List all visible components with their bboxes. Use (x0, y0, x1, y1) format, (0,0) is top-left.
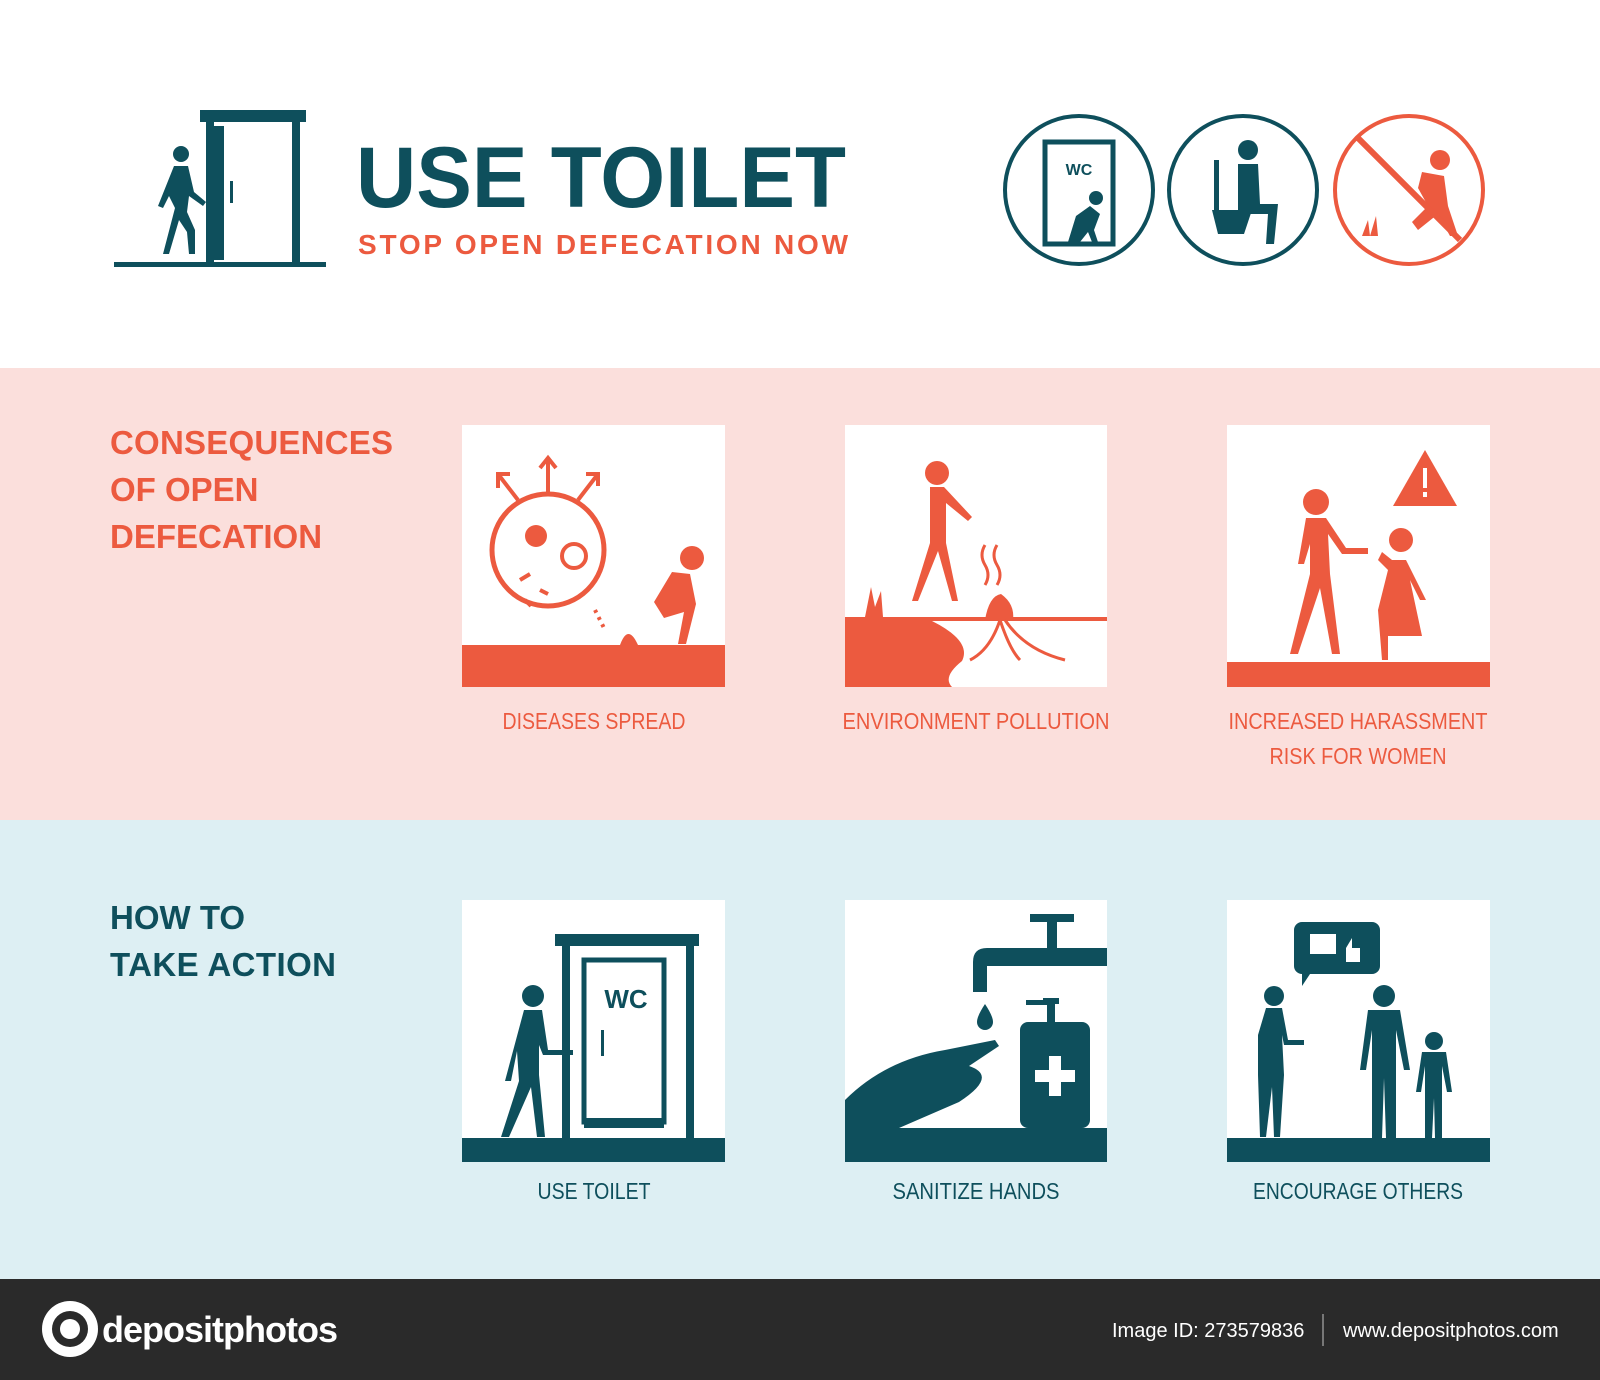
band: action background (0, 820, 1600, 1279)
footer: depositphotos (102, 1309, 337, 1350)
heading: consequences: CONSEQUENCES (110, 424, 393, 461)
header background (0, 0, 1600, 368)
footer: Image ID: 273579836 (1112, 1320, 1304, 1342)
panel: diseases spread (462, 425, 725, 687)
panel: harassment (1227, 425, 1490, 687)
panel: use toilet (462, 900, 725, 1162)
icon: WC circle (1005, 116, 1153, 264)
caption: use toilet: USE TOILET (538, 1178, 650, 1204)
heading: consequences: OF OPEN (110, 471, 259, 508)
heading: consequences (110, 424, 393, 555)
panel: use toilet: WC (604, 984, 648, 1014)
heading: how to take action (110, 899, 336, 983)
footer (0, 1279, 1600, 1380)
band: consequences background (0, 368, 1600, 820)
panel: encourage others (1227, 900, 1490, 1162)
icon: no open defecation circle (1335, 116, 1483, 264)
icon: WC circle: WC (1066, 162, 1093, 179)
icon: person entering door (114, 110, 326, 267)
heading: how to take action: TAKE ACTION (110, 946, 336, 983)
title: USE TOILET (356, 130, 846, 226)
icon: sitting on toilet circle (1169, 116, 1317, 264)
caption: environment pollution: ENVIRONMENT POLLUTION (842, 708, 1110, 734)
caption: harassment: RISK FOR WOMEN (1270, 743, 1446, 769)
caption: encourage others: ENCOURAGE OTHERS (1253, 1178, 1463, 1204)
caption: harassment (1228, 708, 1488, 769)
heading: consequences: DEFECATION (110, 518, 322, 555)
caption: harassment: INCREASED HARASSMENT (1228, 708, 1488, 734)
footer: www.depositphotos.com (1342, 1320, 1559, 1342)
heading: how to take action: HOW TO (110, 899, 245, 936)
subtitle: STOP OPEN DEFECATION NOW (358, 229, 849, 260)
caption: diseases spread: DISEASES SPREAD (502, 708, 686, 734)
panel: environment pollution (845, 425, 1107, 687)
panel: sanitize hands (845, 900, 1107, 1162)
caption: sanitize hands: SANITIZE HANDS (892, 1178, 1060, 1204)
